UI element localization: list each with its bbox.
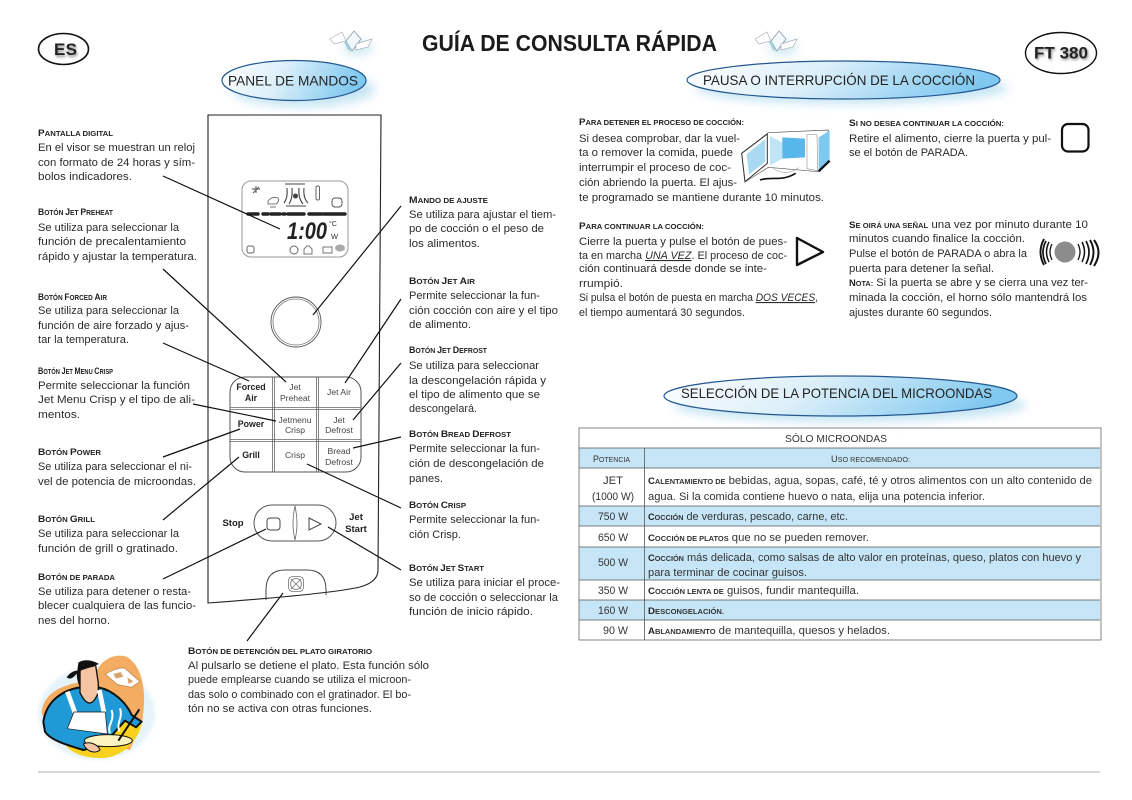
heading: selección de la potencia: SELECCIÓN DE LA POTENCIA DEL MICROONDAS [681,385,992,401]
text: botón jet menu crisp: BOTÓN JET MENU CRISP [38,366,113,377]
text: botón jet defrost: BOTÓN JET DEFROST [409,345,487,356]
text: botón de detención del plato giratorio: puede emplearse cuando se utiliza el microon- [188,674,411,686]
button grid: Jet [333,415,345,425]
text: se oirá una señal: ajustes durante 60 segundos. [849,307,992,319]
power table: 160 W [598,605,628,617]
power table: agua. Si la comida contiene huevo o nata, elija una potencia inferior. [648,491,985,503]
text: pantalla digital: En el visor se muestran un reloj [38,142,195,154]
text: para continuar la cocción: rrumpió. [579,278,623,290]
text: botón bread defrost [409,429,544,485]
power table: POTENCIA [593,454,630,465]
text: botón bread defrost: panes. [409,473,443,485]
text: botón de parada: BOTÓN DE PARADA [38,572,116,583]
icon: open microwave [742,130,830,182]
lcd display: W [331,232,339,241]
text: botón jet air: Permite seleccionar la fun- [409,290,540,302]
adjustment dial [271,297,321,347]
icon: open book right [755,31,798,55]
text: para detener el proceso: ción abriendo la puerta. El ajus- [579,177,737,189]
text: botón jet air [409,276,558,331]
power table: COCCIÓN LENTA DE guisos, fundir mantequilla. [648,585,859,597]
text: botón jet menu crisp: Permite seleccionar la función [38,380,190,392]
table usage column: CALENTAMIENTO DE bebidas, agua, sopas, café, té y otros alimentos con un alto contenido de [648,475,1092,487]
text: botón de detención del plato giratorio [188,646,429,715]
text: botón jet air: BOTÓN JET AIR [409,276,476,287]
text: para continuar la cocción: ta en marcha UNA VEZ. El proceso de coc- [579,250,787,262]
text: mando de ajuste [409,195,556,250]
power table: USO RECOMENDADO: [831,454,910,465]
icon: open book left [330,31,373,55]
stop and start buttons: Jet [349,512,364,523]
power table: COCCIÓN de verduras, pescado, carne, etc. [648,511,848,523]
text: para detener el proceso [579,117,824,204]
text: botón power: BOTÓN POWER [38,447,102,458]
model badge FT 380: FT 380 [1035,45,1089,64]
text: mando de ajuste: MANDO DE AJUSTE [409,195,488,206]
text: mando de ajuste: po de cocción o el peso de [409,223,544,235]
power table: ABLANDAMIENTO de mantequilla, quesos y helados. [648,625,890,637]
text: botón grill [38,514,180,555]
text: botón jet preheat: Se utiliza para seleccionar la [38,222,180,234]
icon: sound signal [1040,239,1098,266]
text: se oirá una señal: Pulse el botón de PARADA o abra la [849,248,1028,260]
text: botón de detención del plato giratorio: tón no se activa con otras funciones. [188,703,372,715]
text: botón de detención del plato giratorio: das solo o combinado con el gratinador. El bo- [188,689,411,701]
table power column: JET [603,475,623,487]
text: para continuar la cocción [579,221,818,319]
text: botón jet preheat: función de precalentamiento [38,236,186,248]
text: botón power [38,447,196,488]
text: para detener el proceso: ta o remover la comida, puede [579,147,733,159]
lcd display: °C [329,220,337,228]
icon: stop square [1062,124,1088,152]
button grid [230,377,361,472]
heading: panel de mandos: PANEL DE MANDOS [228,72,358,88]
text: se oirá una señal: NOTA: Si la puerta se abre y se cierra una vez ter- [849,277,1088,289]
power table [579,428,1101,640]
illustration: chef with bowl [38,656,155,760]
power table: DESCONGELACIÓN. [648,606,724,617]
icon: start triangle [797,238,823,265]
text: se oirá una señal: SE OIRÁ UNA SEÑAL una vez por minuto durante 10 [849,219,1088,231]
button grid: Jet [289,382,301,392]
text: botón bread defrost: Permite seleccionar la fun- [409,443,540,455]
turntable stop button [266,570,326,600]
text: botón forced air: BOTÓN FORCED AIR [38,292,108,303]
text: botón crisp: Permite seleccionar la fun- [409,514,540,526]
power table: para terminar de cocinar guisos. [648,567,807,579]
text: para detener el proceso: Si desea comprobar, dar la vuel- [579,133,740,145]
text: para detener el proceso: interrumpir el proceso de coc- [579,162,731,174]
heading: pausa o interrupción: PAUSA O INTERRUPCIÓN DE LA COCCIÓN [703,72,975,88]
button grid: Forced [236,382,266,392]
text: botón forced air: función de aire forzado y ajus- [38,320,189,332]
button grid: Defrost [325,457,353,467]
text: para continuar la cocción: Si pulsa el botón de puesta en marcha DOS VECES, [579,292,818,304]
leader lines [163,176,401,641]
button grid: Jetmenu [279,415,312,425]
text: botón bread defrost: ción de descongelación de [409,458,544,470]
button grid: Preheat [280,393,311,403]
button grid: Grill [242,450,260,460]
text: si no desea continuar [849,118,1051,159]
text: botón jet defrost: Se utiliza para seleccionar [409,360,539,372]
text: botón de detención del plato giratorio: Al pulsarlo se detiene el plato. Esta función sólo [188,660,429,672]
table header: SÓLO MICROONDAS [785,432,887,445]
title: GUÍA DE CONSULTA RÁPIDA [422,29,717,56]
text: se oirá una señal: puerta para detener la señal. [849,263,994,275]
power table: 650 W [598,532,628,544]
text: para continuar la cocción: PARA CONTINUAR LA COCCIÓN: [579,221,704,232]
button grid: Jet Air [327,387,351,397]
button grid: Bread [328,446,351,456]
power table: 500 W [598,557,628,569]
text: pantalla digital [38,128,195,183]
text: para detener el proceso: PARA DETENER EL PROCESO DE COCCIÓN: [579,117,744,128]
text: mando de ajuste: los alimentos. [409,238,480,250]
language badge ES: ES [55,42,78,61]
text: botón jet preheat: BOTÓN JET PREHEAT [38,207,113,218]
stop and start buttons [222,505,368,541]
text: botón jet defrost: el tipo de alimento que se [409,389,540,401]
text: botón de parada: blecer cualquiera de las funcio- [38,600,196,612]
power table: 750 W [598,511,628,523]
text: pantalla digital: bolos indicadores. [38,171,132,183]
text: botón jet menu crisp: mentos. [38,409,80,421]
button grid: Power [238,419,265,429]
lcd display [242,181,348,257]
table shading [579,448,1100,620]
heading: pausa o interrupción [687,61,1008,104]
text: botón jet preheat: rápido y ajustar la temperatura. [38,251,197,263]
power table: 90 W [603,625,628,637]
text: botón de parada [38,572,196,627]
power table: 350 W [598,585,628,597]
text: botón de parada: Se utiliza para detener o resta- [38,586,191,598]
text: botón forced air [38,292,189,346]
text: botón grill: función de grill o gratinado. [38,543,178,555]
text: botón jet start: función de inicio rápido. [409,606,533,618]
text: para continuar la cocción: el tiempo aumentará 30 segundos. [579,307,745,319]
control panel drawing [208,115,381,603]
text: botón bread defrost: BOTÓN BREAD DEFROST [409,429,511,440]
text: si no desea continuar: Retire el alimento, cierre la puerta y pul- [849,133,1051,145]
text: si no desea continuar: SI NO DESEA CONTINUAR LA COCCIÓN: [849,118,1004,129]
text: botón jet air: ción cocción con aire y el tipo [409,305,558,317]
text: se oirá una señal: minada la cocción, el horno sólo mantendrá los [849,292,1087,304]
text: botón power: vel de potencia de microondas. [38,476,196,488]
text: botón forced air: Se utiliza para seleccionar la [38,305,180,317]
text: para detener el proceso: te programado se mantiene durante 10 minutos. [579,192,824,204]
button grid: Air [245,393,258,403]
text: se oirá una señal [849,219,1088,319]
text: se oirá una señal: minutos cuando finalice la cocción. [849,233,1025,245]
text: botón jet menu crisp: Jet Menu Crisp y el tipo de ali- [38,394,195,406]
language badge ES [38,34,88,64]
text: botón jet start: BOTÓN JET START [409,563,484,574]
text: botón grill: BOTÓN GRILL [38,514,96,525]
button grid: Defrost [325,425,353,435]
text: botón jet defrost: la descongelación rápida y [409,375,546,387]
text: pantalla digital: con formato de 24 horas y sím- [38,157,195,169]
text: botón crisp [409,500,540,541]
heading: selección de la potencia [664,376,1026,422]
text: botón jet defrost: descongelará. [409,403,477,415]
text: mando de ajuste: Se utiliza para ajustar el tiem- [409,209,556,221]
text: botón jet defrost [409,345,546,415]
button grid: Crisp [285,425,305,435]
text: botón jet preheat [38,207,197,263]
text: botón forced air: tar la temperatura. [38,334,129,346]
text: pantalla digital: PANTALLA DIGITAL [38,128,114,139]
lcd display: 1:00 [287,218,328,245]
text: botón jet start: Se utiliza para iniciar el proce- [409,577,560,589]
text: para continuar la cocción: ción continuará desde donde se inte- [579,263,767,275]
power table: COCCIÓN más delicada, como salsas de alto valor en proteínas, queso, platos con huevo y [648,552,1081,564]
text: si no desea continuar: se el botón de PARADA. [849,147,968,159]
power table: (1000 W) [592,491,634,503]
text: botón de detención del plato giratorio: BOTÓN DE DETENCIÓN DEL PLATO GIRATORIO [188,646,372,657]
panel outline [208,115,381,603]
text: botón jet start: so de cocción o seleccionar la [409,592,559,604]
text: botón jet air: de alimento. [409,319,471,331]
stop and start buttons: Start [345,524,368,535]
model badge FT 380 [1026,32,1096,74]
language badge ES: ES [54,40,77,59]
text: botón jet menu crisp [38,366,195,421]
text: botón crisp: BOTÓN CRISP [409,500,466,511]
power table: COCCIÓN DE PLATOS que no se pueden remover. [648,532,869,544]
heading: panel de mandos [222,60,375,107]
model badge FT 380: FT 380 [1034,44,1088,62]
text: botón crisp: ción Crisp. [409,529,461,541]
text: botón grill: Se utiliza para seleccionar la [38,528,180,540]
text: botón de parada: nes del horno. [38,615,110,627]
text: para continuar la cocción: Cierre la puerta y pulse el botón de pues- [579,236,787,248]
text: botón power: Se utiliza para seleccionar el ni- [38,461,192,473]
stop and start buttons: Stop [222,518,244,529]
button grid: Crisp [285,450,305,460]
text: botón jet start [409,563,560,618]
